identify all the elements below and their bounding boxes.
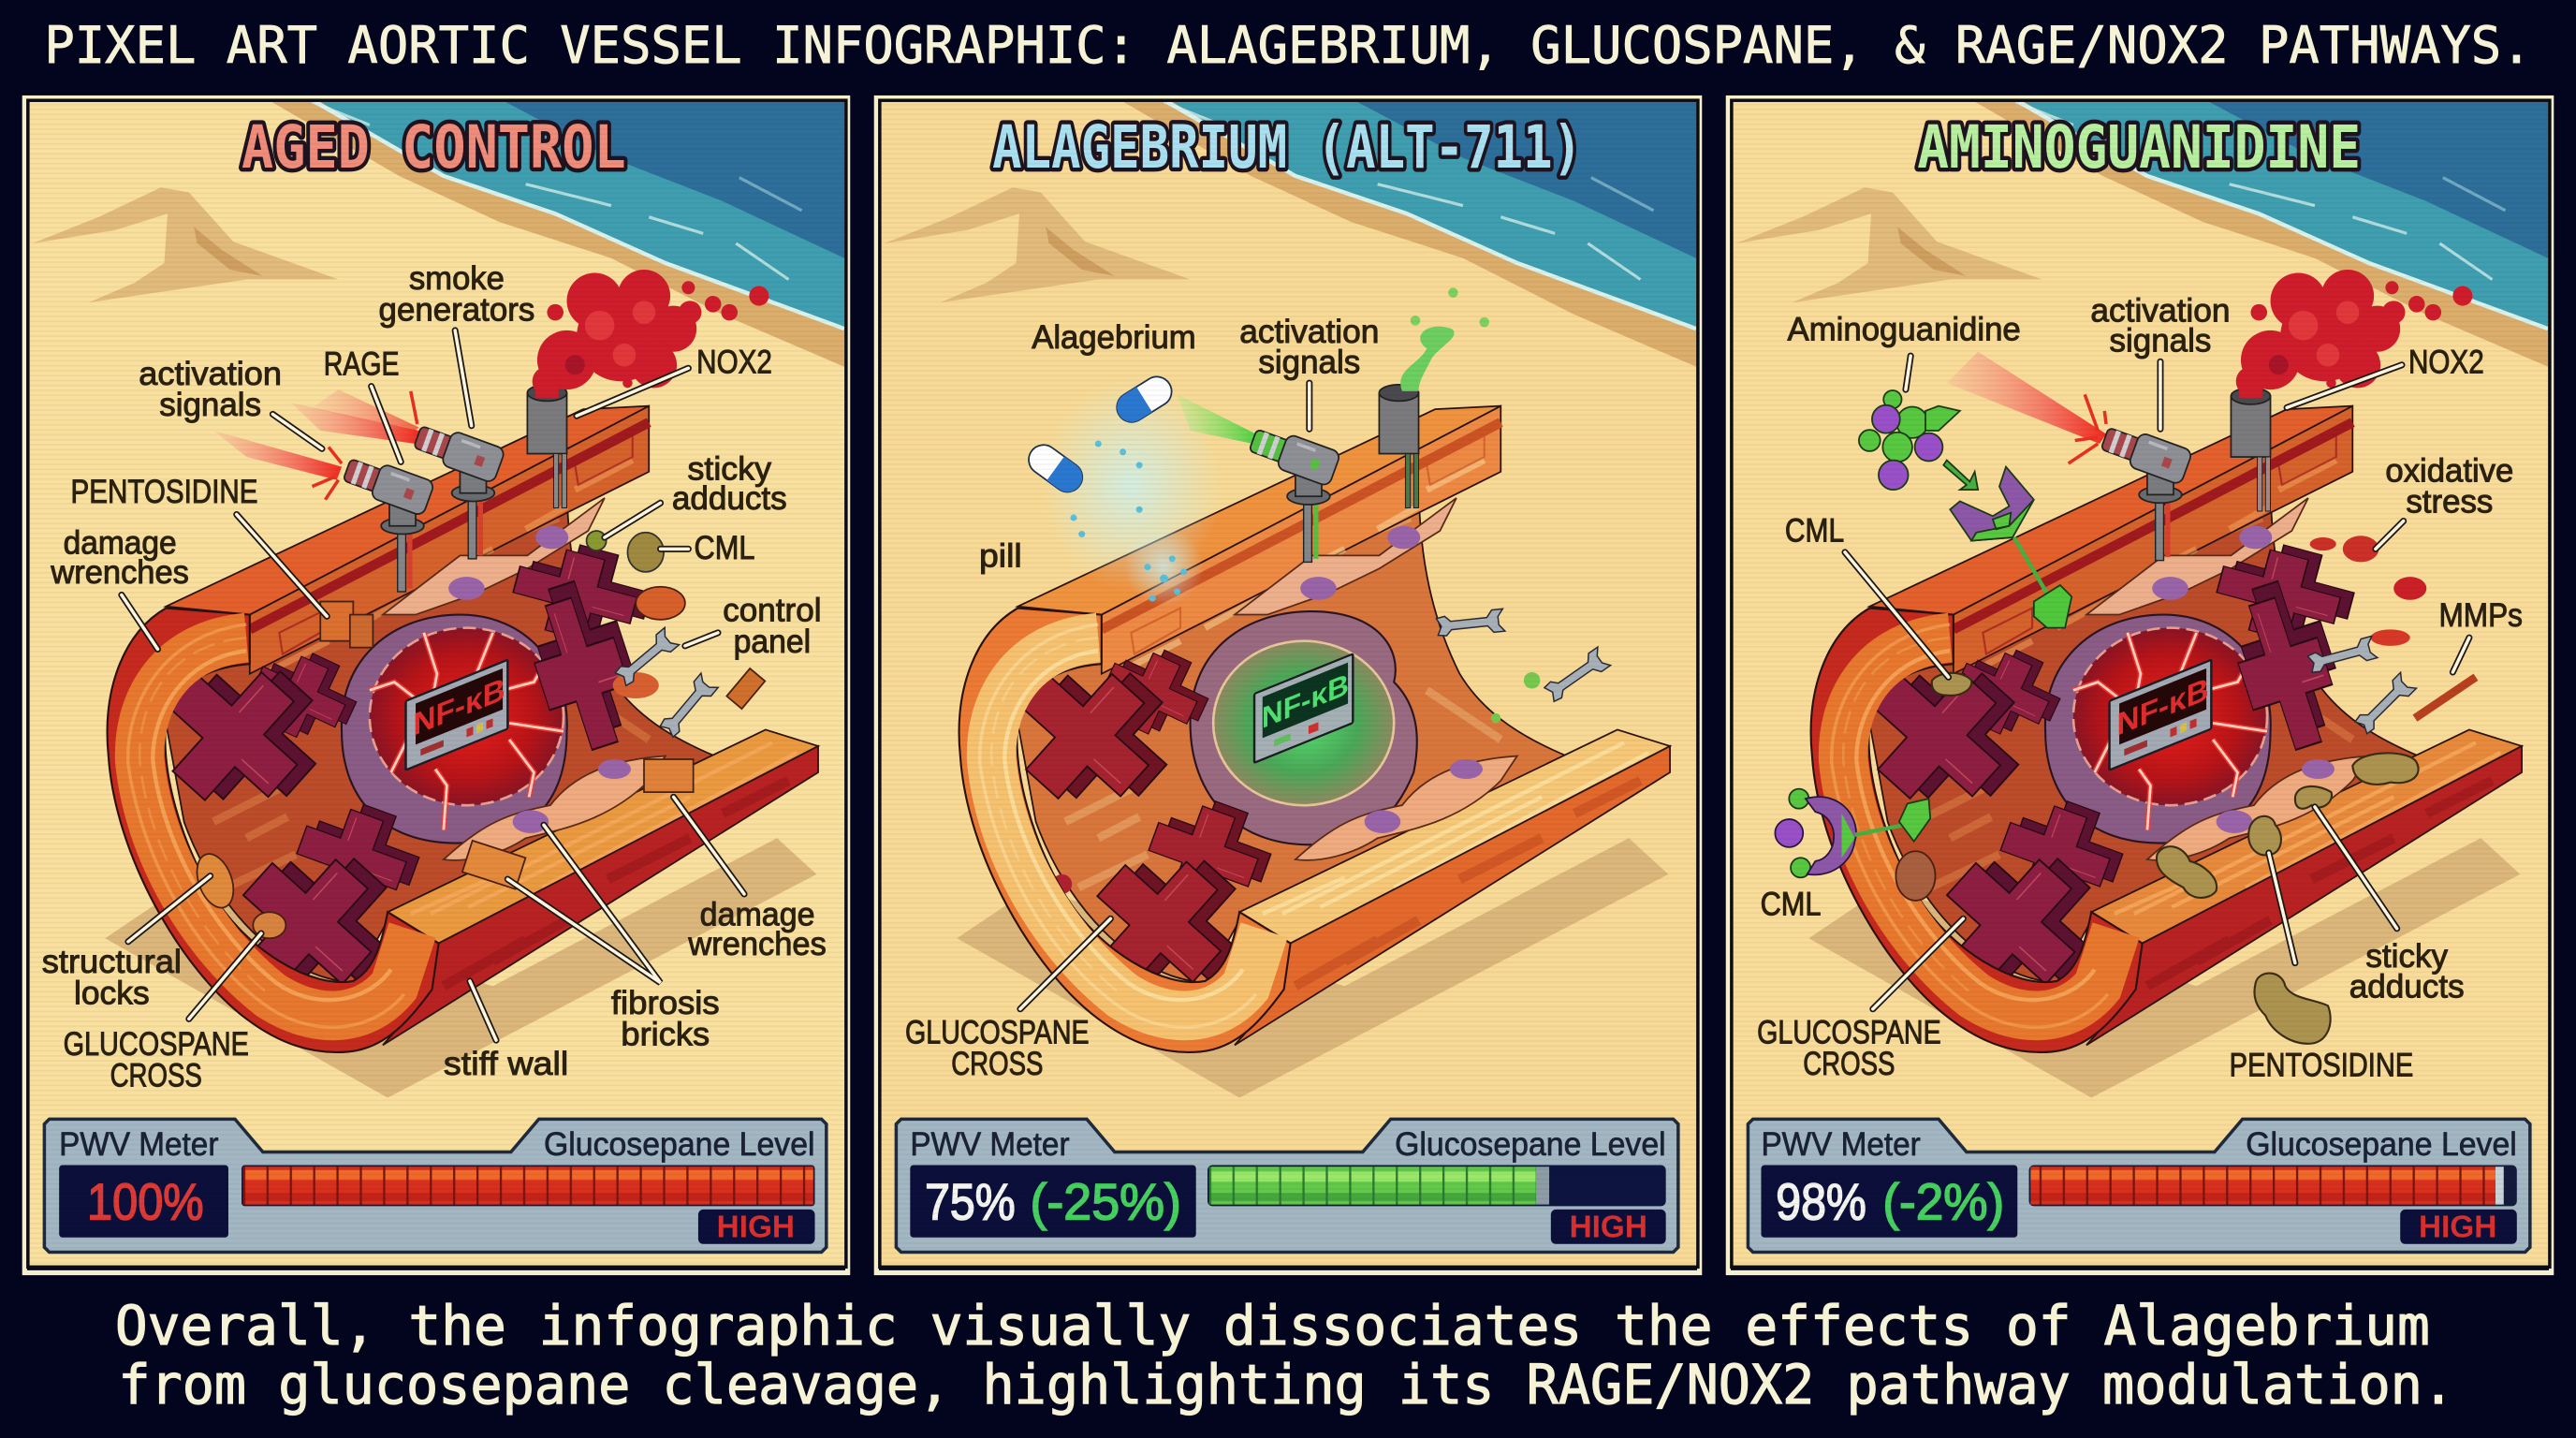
label: structural locks: locks — [74, 976, 150, 1012]
label: glucospane cross: GLUCOSPANE — [905, 1015, 1090, 1051]
label: control panel: panel — [734, 624, 811, 660]
label: glucospane cross: CROSS — [1803, 1046, 1895, 1082]
aminoguanidine molecule, arrow and enzyme — [1859, 390, 2071, 628]
label: Aminoguanidine — [1788, 311, 2021, 389]
title: PIXEL ART AORTIC VESSEL INFOGRAPHIC: ALAGEBRIUM, GLUCOSPANE, & RAGE/NOX2 PATHWAYS. — [44, 16, 2532, 75]
panel: aged control — [24, 98, 848, 1272]
label: glucospane cross: CROSS — [110, 1057, 202, 1093]
glucosepane crosses — [1845, 531, 2362, 1026]
label: Alagebrium: Alagebrium — [1032, 319, 1196, 356]
meter panel: aged control: PWV Meter — [59, 1126, 219, 1163]
label: glucospane cross: GLUCOSPANE — [1757, 1015, 1941, 1051]
meter panel: alagebrium: PWV Meter — [910, 1126, 1070, 1163]
NF-kB nucleus — [2045, 615, 2271, 844]
label: Aminoguanidine: Aminoguanidine — [1788, 311, 2021, 347]
label: glucospane cross — [905, 918, 1110, 1082]
label: damage wrenches lower: damage — [700, 896, 815, 932]
meter panel: aminoguanidine: (-2%) — [1882, 1173, 2004, 1230]
label: damage wrenches upper: wrenches — [50, 554, 189, 591]
label: control panel — [685, 593, 822, 660]
chimney with green smoke — [1379, 287, 1489, 507]
conclusion text — [115, 1294, 2454, 1416]
fibrosis bricks, locks and wrenches — [190, 531, 765, 938]
label: CML upper — [1785, 512, 1949, 677]
heading: alagebrium: ALAGEBRIUM (ALT-711) — [992, 112, 1582, 182]
pills and dissolving sparkle — [1023, 371, 1222, 607]
label: oxidative stress: stress — [2406, 484, 2493, 521]
label: pill: pill — [979, 538, 1022, 575]
label: PENTOSIDINE: PENTOSIDINE — [70, 474, 258, 510]
illustration: red vessel with partial treatment — [1775, 270, 2522, 1098]
label: activation signals: signals — [2110, 323, 2211, 360]
RAGE cannon with red rays — [1947, 352, 2193, 561]
conclusion text: from glucosepane cleavage, highlighting its RAGE/NOX2 pathway modulation. — [118, 1353, 2454, 1416]
meter panel: aminoguanidine — [1748, 1119, 2530, 1253]
label: sticky adducts: sticky — [2365, 938, 2449, 975]
label: damage wrenches lower — [674, 797, 827, 962]
label: stiff wall — [444, 981, 568, 1082]
label: CML lower: CML — [1761, 887, 1822, 923]
label: sticky adducts: adducts — [672, 480, 787, 517]
NF-kB nucleus — [342, 615, 567, 844]
meter panel: alagebrium: Glucosepane Level — [1395, 1126, 1666, 1163]
label: activation signals: signals — [1258, 345, 1360, 381]
label: stiff wall: stiff wall — [444, 1046, 568, 1082]
meter panel: alagebrium: 75% — [925, 1173, 1016, 1230]
meter panel: aminoguanidine: PWV Meter — [1761, 1126, 1921, 1163]
label: sticky adducts — [605, 451, 787, 537]
meter panel: alagebrium — [896, 1119, 1678, 1253]
RAGE cannons with activation rays — [213, 389, 505, 592]
label: PENTOSIDINE: PENTOSIDINE — [2230, 1048, 2413, 1084]
meter panel: alagebrium: (-25%) — [1030, 1173, 1181, 1230]
label: glucospane cross: GLUCOSPANE — [64, 1026, 249, 1063]
heading: aminoguanidine: AMINOGUANIDINE — [1917, 112, 2361, 182]
label: MMPs — [2438, 597, 2523, 672]
heading: aged control: AGED CONTROL — [242, 112, 626, 182]
RAGE cannon with green signal — [1178, 394, 1341, 562]
label: damage wrenches upper — [50, 525, 189, 649]
glucosepane crosses — [993, 634, 1281, 1022]
label: activation signals: activation — [2090, 292, 2231, 329]
meter panel: aged control: 100% — [87, 1173, 204, 1230]
meter panel: alagebrium: HIGH — [1570, 1211, 1647, 1245]
label: activation signals — [1239, 314, 1379, 429]
label: structural locks — [42, 876, 211, 1012]
label: RAGE — [324, 345, 401, 462]
panel: alagebrium — [876, 98, 1700, 1272]
label: structural locks: structural — [42, 944, 182, 980]
chimney NOX2 with red smoke — [527, 270, 768, 507]
label: fibrosis bricks — [507, 825, 720, 1052]
label: PENTOSIDINE — [70, 474, 327, 616]
label: fibrosis bricks: bricks — [621, 1016, 710, 1052]
glucosepane crosses — [139, 531, 658, 1026]
label: activation signals — [2090, 292, 2231, 429]
label: CML — [661, 530, 754, 566]
meter panel: aged control: Glucosepane Level — [544, 1126, 815, 1163]
loose wrenches and green particles — [1436, 609, 1611, 723]
conclusion text: Overall, the infographic visually dissociates the effects of Alagebrium — [115, 1294, 2430, 1357]
label: activation signals: signals — [159, 387, 261, 423]
calm NF-kB nucleus — [1191, 611, 1417, 844]
pentosidine and sticky adduct blobs — [1932, 673, 2419, 1044]
label: sticky adducts — [2315, 807, 2465, 1005]
meter panel: aminoguanidine: 98% — [1776, 1173, 1866, 1230]
label: activation signals — [139, 356, 322, 448]
label: oxidative stress: oxidative — [2385, 452, 2513, 489]
meter panel: aged control — [44, 1119, 827, 1253]
meter panel: aminoguanidine: HIGH — [2419, 1211, 2496, 1245]
label: damage wrenches upper: damage — [64, 525, 177, 562]
label: CML upper: CML — [1785, 512, 1844, 549]
label: control panel: control — [723, 593, 822, 629]
label: CML: CML — [695, 530, 754, 566]
label: activation signals: activation — [1239, 314, 1379, 350]
label: RAGE: RAGE — [324, 345, 399, 382]
label: sticky adducts: adducts — [2349, 968, 2465, 1005]
label: sticky adducts: sticky — [688, 451, 771, 488]
illustration: orange healthier aortic vessel — [957, 287, 1670, 1098]
calm NF-kB nucleus: NF-κB — [1262, 667, 1349, 735]
label: NOX2 — [577, 345, 772, 416]
left enzyme and CML blob — [1775, 789, 1936, 901]
label: activation signals: activation — [139, 356, 282, 392]
label: smoke generators — [379, 260, 534, 426]
meter panel: aminoguanidine: Glucosepane Level — [2246, 1126, 2517, 1163]
illustration: red stiffened aortic vessel — [105, 270, 818, 1098]
chimney NOX2 with red smoke — [2231, 270, 2472, 511]
label: smoke generators: generators — [379, 291, 534, 328]
label: damage wrenches lower: wrenches — [687, 926, 827, 962]
panel: aminoguanidine — [1728, 98, 2552, 1272]
oxidative stress, wrenches and MMPs — [2307, 536, 2476, 736]
label: fibrosis bricks: fibrosis — [611, 985, 720, 1021]
label: PENTOSIDINE — [2230, 853, 2413, 1084]
label: oxidative stress — [2376, 452, 2513, 549]
meter panel: aged control: HIGH — [717, 1211, 795, 1245]
label: NOX2: NOX2 — [696, 345, 772, 381]
label: smoke generators: smoke — [409, 260, 505, 297]
label: NOX2: NOX2 — [2408, 345, 2484, 381]
label: glucospane cross — [64, 933, 261, 1093]
label: MMPs: MMPs — [2438, 597, 2523, 634]
label: glucospane cross: CROSS — [951, 1046, 1043, 1082]
label: glucospane cross — [1757, 918, 1963, 1082]
label: NOX2 — [2287, 345, 2484, 407]
